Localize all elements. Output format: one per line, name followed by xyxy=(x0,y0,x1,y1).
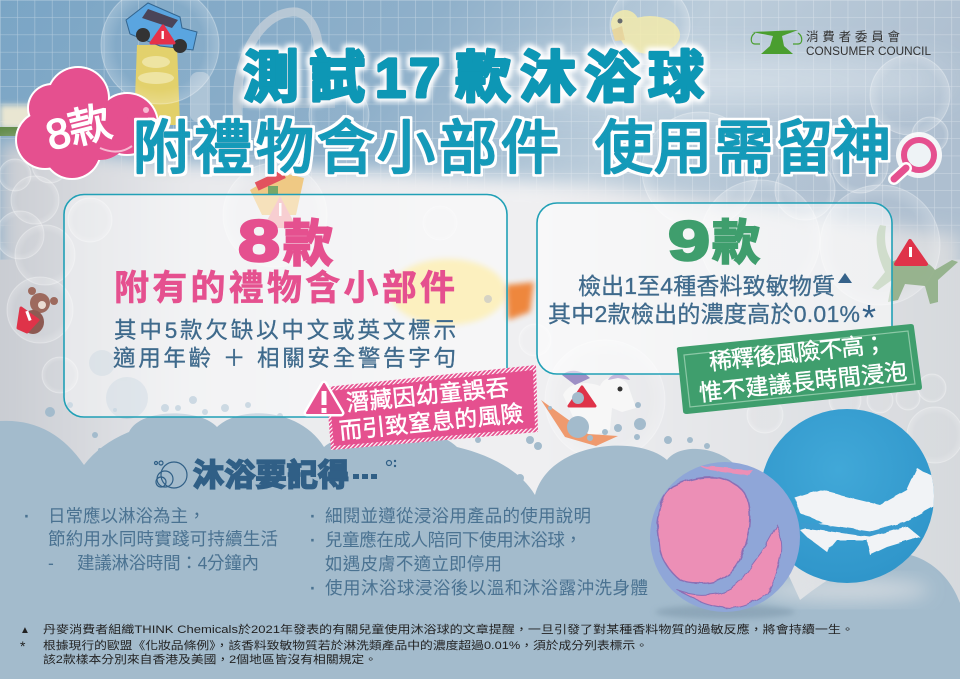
toy: teddy bear with warning sign xyxy=(18,287,58,334)
text: missing labels: 適用年齡 ＋ 相關安全警告字句 xyxy=(113,346,456,371)
text: allergens detected: 其中2款檢出的濃度高於0.01% xyxy=(548,301,860,327)
text: missing labels: 其中5款欠缺以中文或英文標示 xyxy=(114,318,456,343)
text: allergens detected: 檢出1至4種香料致敏物質 xyxy=(578,273,835,299)
panel: 9款 fragrance allergens xyxy=(537,203,892,374)
heading: bath reminders with bubble icon: 沐浴要記得 xyxy=(193,458,349,493)
subheading: gifts contain small parts: 附有的禮物含小部件 xyxy=(114,269,455,308)
footnotes xyxy=(20,622,854,666)
subtitle: 附禮物含小部件 使用需留神 xyxy=(133,116,891,181)
footnotes: * xyxy=(20,638,26,654)
icon: warning triangle xyxy=(307,384,341,413)
heading: 9款: 款 xyxy=(712,217,760,270)
list: bath tips right: · xyxy=(310,578,316,598)
foam dots along the cloud edge xyxy=(45,396,710,496)
toy: green dinosaur with warning sign xyxy=(872,225,958,304)
toy: yellow rubber duck xyxy=(611,10,680,54)
footnotes: 該2款樣本分別來自香港及美國，2個地區皆沒有相關規定。 xyxy=(43,652,377,666)
list: bath tips left xyxy=(24,506,278,573)
panel: 8款 small parts xyxy=(64,194,507,417)
callout: choking risk xyxy=(307,365,538,450)
blurred toy: yellow duck xyxy=(390,259,534,325)
toy: jeep with warning sign xyxy=(126,3,197,53)
callout: low risk after dilution xyxy=(677,324,922,414)
text: missing labels xyxy=(113,318,456,371)
toy: unicorn rocking horse with warning sign xyxy=(541,371,636,446)
list: bath tips right: 如遇皮膚不適立即停用 xyxy=(325,554,502,574)
bath bomb: blue and white xyxy=(760,409,940,583)
logo: Consumer Council: 消費者委員會 xyxy=(806,29,900,44)
badge: pink flower with 8款 xyxy=(15,66,159,180)
logo: Consumer Council: CONSUMER COUNCIL xyxy=(806,44,931,58)
bottom cloud panel xyxy=(0,413,960,679)
heading: 9款: 9 xyxy=(668,209,710,272)
heading: bath reminders with bubble icon xyxy=(154,458,396,493)
list: bath tips right: 兒童應在成人陪同下使用沐浴球， xyxy=(325,530,582,550)
footnotes: 丹麥消費者組織THINK Chemicals於2021年發表的有關兒童使用沐浴球的文章提醒，一旦引發了對某種香料物質的過敏反應，將會持續一生。 xyxy=(43,622,854,636)
footnotes: ▲ xyxy=(20,625,30,636)
callout: choking risk: 潛藏因幼童誤吞 xyxy=(345,374,510,416)
icon: magnifying glass xyxy=(894,132,942,179)
title: 測試17款沐浴球 xyxy=(243,46,704,109)
list: bath tips left: - xyxy=(48,553,54,573)
list: bath tips right: · xyxy=(310,506,316,526)
pale foam bubble circles xyxy=(89,350,148,419)
toy: train with warning sign xyxy=(250,170,304,228)
footnotes: 根據現行的歐盟《化妝品條例》，該香料致敏物質若於淋洗類產品中的濃度超過0.01%，須於成分列表標示。 xyxy=(43,638,648,652)
logo: Consumer Council xyxy=(751,29,931,58)
list: bath tips left: 建議淋浴時間：4分鐘內 xyxy=(77,553,259,573)
callout: low risk after dilution: 惟不建議長時間浸泡 xyxy=(698,358,908,406)
heading: 8款: 8 xyxy=(238,209,280,274)
callout: low risk after dilution: 稀釋後風險不高； xyxy=(708,331,888,375)
callout: choking risk: 而引致窒息的風險 xyxy=(338,400,525,444)
list: bath tips right xyxy=(310,506,648,598)
heading: 8款: 款 xyxy=(283,216,333,272)
background bubbles xyxy=(0,0,960,463)
list: bath tips left: 節約用水同時實踐可持續生活 xyxy=(48,529,278,549)
list: bath tips left: · xyxy=(24,506,30,526)
list: bath tips right: · xyxy=(310,530,316,550)
icon: bubbles xyxy=(154,461,187,488)
heading: 8款 xyxy=(238,209,333,274)
badge: pink flower with 8款: 8款 xyxy=(41,98,116,159)
bath bomb: pink and purple xyxy=(650,462,800,612)
heading: 9款 xyxy=(668,209,760,272)
list: bath tips right: 使用沐浴球浸浴後以溫和沐浴露沖洗身體 xyxy=(325,578,648,598)
list: bath tips right: 細閱並遵從浸浴用產品的使用說明 xyxy=(325,506,591,526)
text: allergens detected xyxy=(548,273,876,338)
text: allergens detected: * xyxy=(862,297,876,338)
list: bath tips left: 日常應以淋浴為主， xyxy=(48,506,206,526)
